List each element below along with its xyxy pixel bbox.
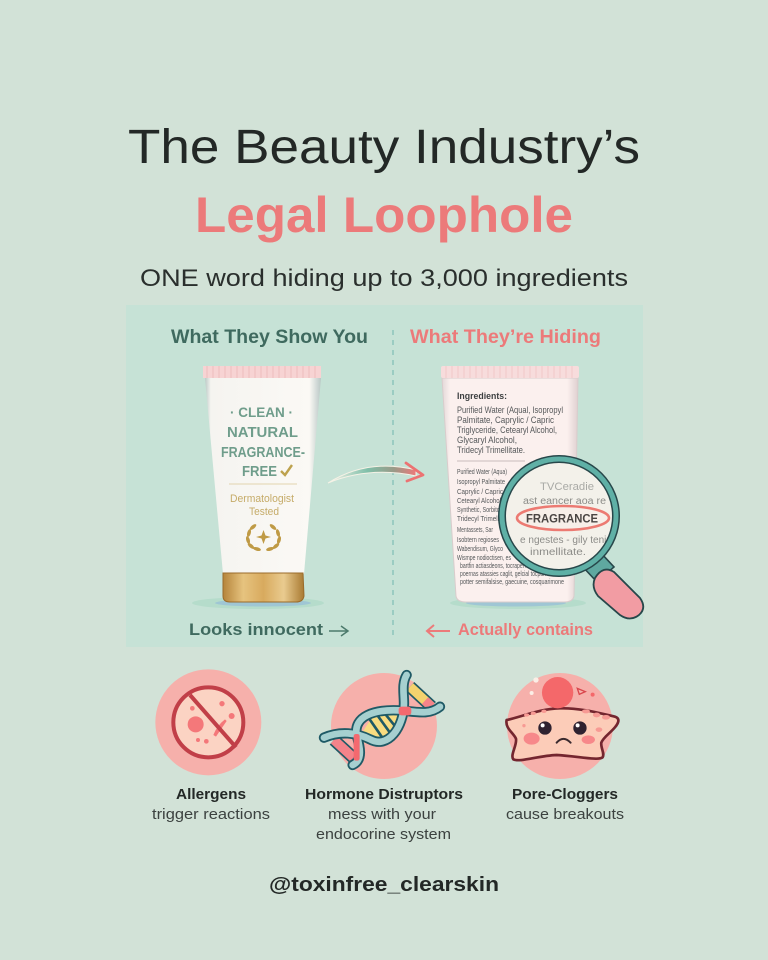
caption: actually contains: Actually contains [458, 620, 593, 639]
ingredient list: Synthetic, Sorbitol [457, 505, 501, 514]
label: hormone disruptors: endocorine system [316, 826, 451, 843]
tube: clean front [192, 366, 324, 609]
ingredient list: Palmitate, Caprylic / Capric [457, 415, 554, 426]
ingredient list: Caprylic / Capric [457, 487, 503, 496]
lens content: inmellitate. [530, 547, 586, 558]
lens content: ast eancer aoa re [523, 496, 606, 507]
arrow: swoosh between tubes [328, 463, 423, 483]
heading: what they're hiding: What They’re Hiding [410, 327, 601, 348]
label: allergens: trigger reactions [152, 806, 270, 823]
panel: comparison illustration [126, 305, 643, 647]
icon: hormone disruptors dna [324, 673, 440, 779]
ingredient list: Wismpe nodioctisen, es [457, 553, 511, 562]
label: pore-cloggers [506, 786, 624, 823]
tube: clean front: FRAGRANCE- [221, 444, 305, 461]
tube: clean front: Tested [249, 506, 279, 518]
arrow: right [329, 626, 348, 636]
ingredient list [457, 391, 564, 586]
tube: clean front: NATURAL [227, 424, 298, 441]
ingredient list: Isopropyl Palmitate [457, 477, 505, 486]
subtitle: ONE word hiding up to 3,000 ingredients [140, 265, 628, 292]
rungs [334, 740, 354, 758]
icon: magnifying glass [502, 459, 643, 618]
label: hormone disruptors: Hormone Distruptors [305, 786, 463, 803]
lens content: FRAGRANCE [526, 512, 598, 526]
caption: looks innocent: Looks innocent [189, 620, 323, 639]
ingredient list: Triglyceride, Cetearyl Alcohol, [457, 425, 557, 436]
ingredient list: Purified Water (Aqua) [457, 467, 507, 476]
handle credit: @toxinfree_clearskin [269, 874, 499, 896]
ingredient list: potter semifalsise, gaecuine, cosquarimone [460, 577, 564, 586]
icon: pore-cloggers [506, 673, 618, 779]
strands [324, 675, 407, 742]
label: pore-cloggers: cause breakouts [506, 806, 624, 823]
divider [392, 330, 394, 640]
ingredient list: Tridecyl Trimell [457, 514, 499, 523]
ingredient list: Purified Water (Aqual, Isopropyl [457, 405, 563, 416]
label: pore-cloggers: Pore-Cloggers [512, 786, 618, 803]
label: hormone disruptors: mess with your [328, 806, 436, 823]
arrow: left [427, 625, 450, 637]
tube: clean front: FREE [242, 463, 277, 480]
ingredient list: Glycaryl Alcohol, [457, 435, 517, 446]
lens content [517, 481, 612, 558]
ingredient list: Cetearyl Alcohol [457, 496, 501, 505]
label: allergens [152, 786, 270, 823]
label: hormone disruptors [305, 786, 463, 843]
ingredient list: Isobtern regioses [457, 535, 499, 544]
title: The Beauty Industry’s [128, 121, 640, 174]
ingredient list: Mentassets, Sar [457, 525, 493, 534]
icon: allergens [155, 669, 261, 775]
highlighted title: Legal Loophole [195, 187, 573, 243]
tube: ingredient back [441, 366, 586, 609]
tube: clean front: · CLEAN · [230, 405, 293, 420]
ingredient list: poernas atassies caglit, gelcial tocpan [460, 569, 546, 578]
ingredient list: Wabendisum, Glyco [457, 544, 503, 553]
ingredient list: Ingredients: [457, 391, 507, 401]
icon: gold check [281, 465, 292, 475]
ingredient list: bartfin actiasdeons, tocrapel neciphen [460, 561, 546, 570]
label: allergens: Allergens [176, 786, 246, 803]
heading: what they show you: What They Show You [171, 327, 368, 348]
ingredient list: Tridecyl Trimellitate. [457, 445, 525, 456]
lens content: e ngestes - gily tenin [520, 534, 612, 546]
icon: laurel badge [245, 523, 282, 552]
lens content: TVCeradie [540, 481, 594, 493]
tube: clean front: Dermatologist [230, 493, 294, 505]
